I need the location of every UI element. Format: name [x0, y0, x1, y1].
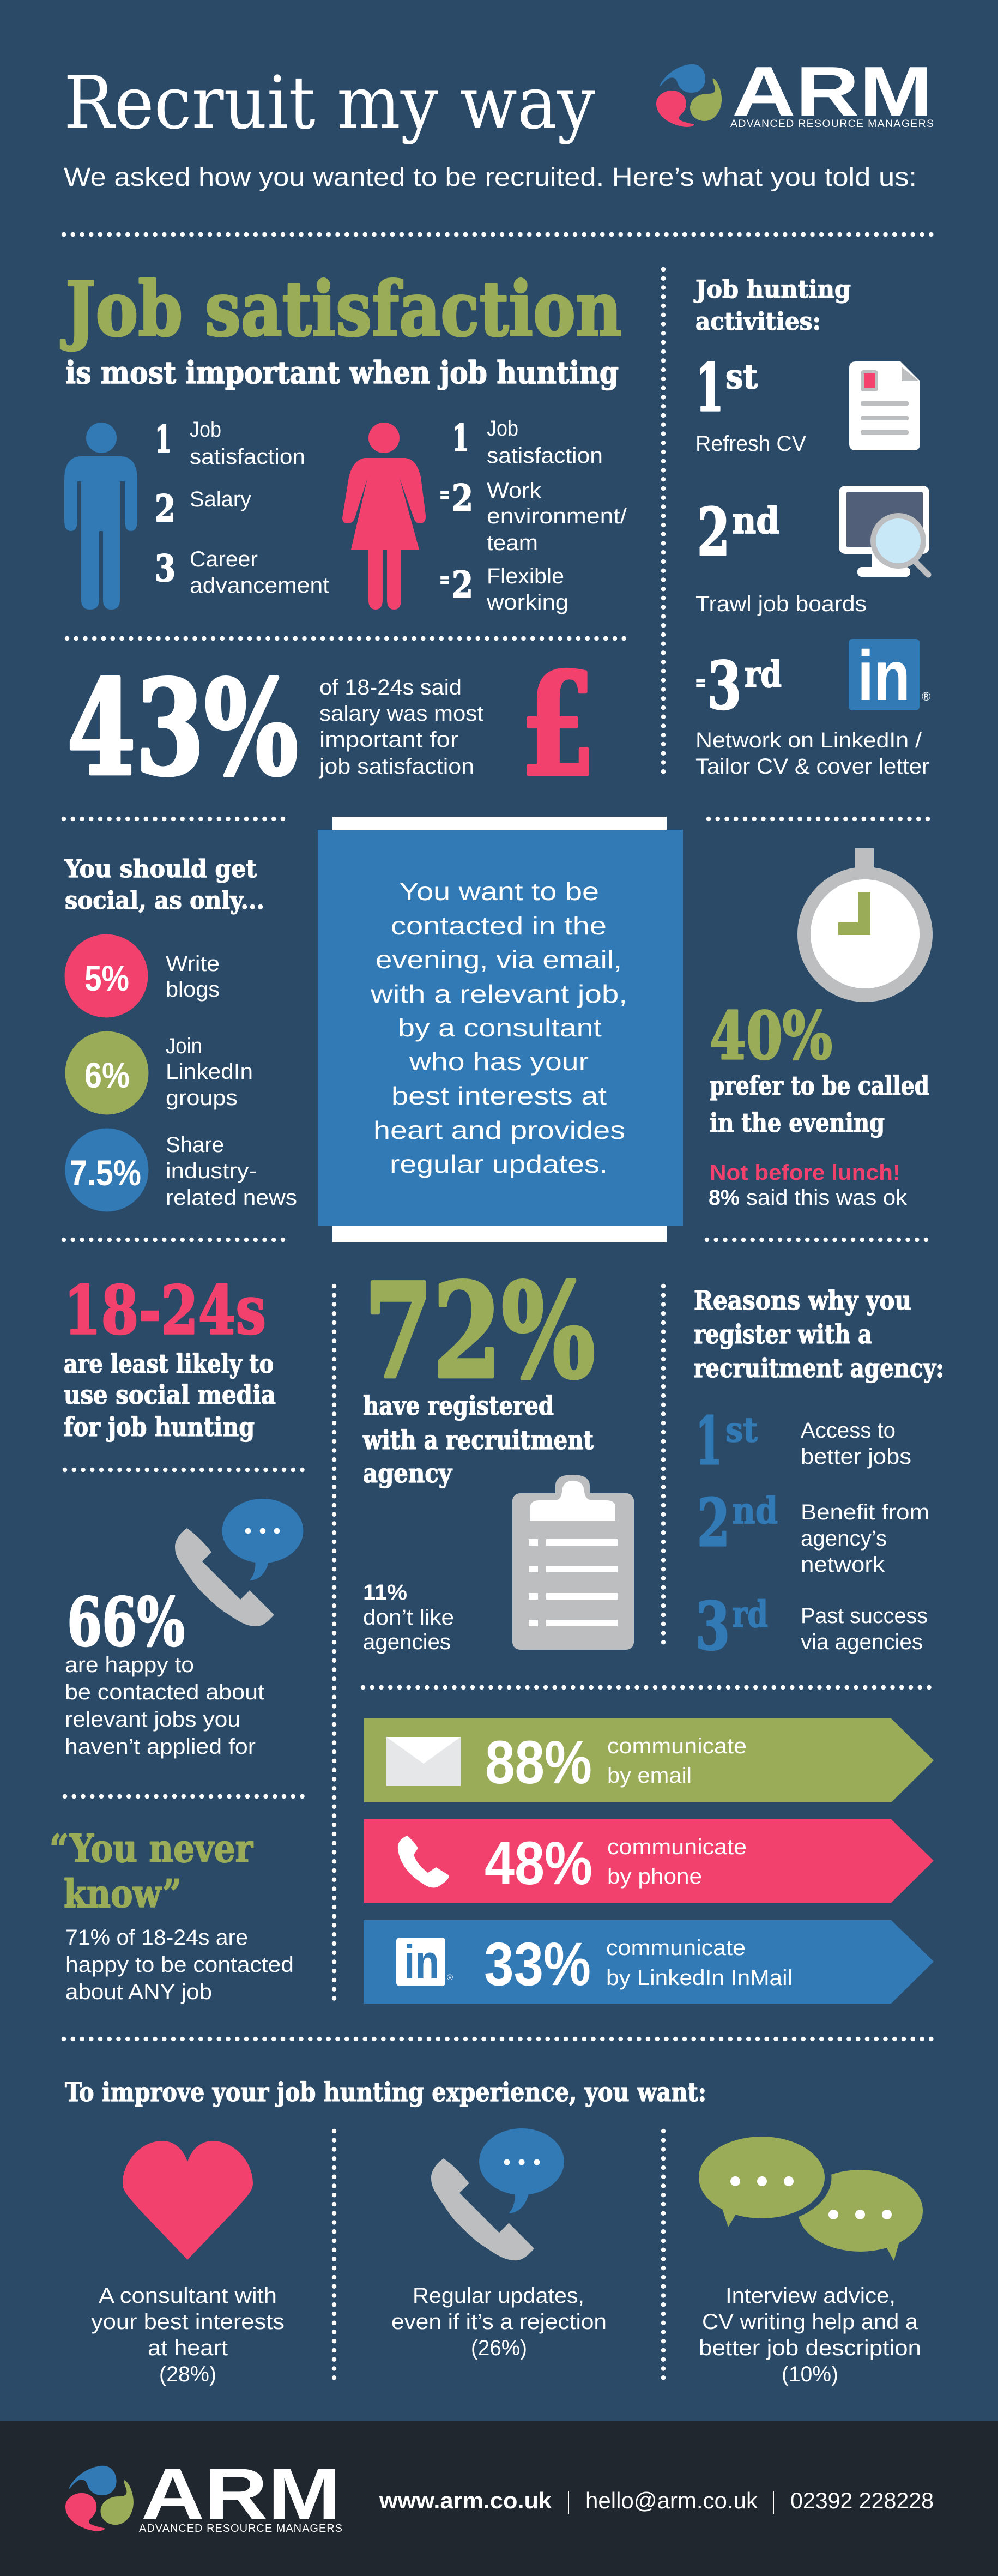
stat: 72%: 72% — [364, 1256, 595, 1408]
text: 11% don't like agencies — [363, 1580, 454, 1654]
text: Regular updates, — [413, 2284, 584, 2308]
heading: job satisfaction: Job satisfaction — [61, 266, 622, 353]
text: 11% don't like agencies: agencies — [363, 1630, 451, 1654]
text: by email: by email — [607, 1764, 692, 1788]
panel: reasons for registering — [694, 1286, 944, 1665]
text: (26%) — [471, 2336, 527, 2360]
icon: pound sign: £ — [521, 642, 595, 807]
icon: linkedin: in — [404, 1935, 439, 1989]
logo: ARM: ARM — [732, 52, 933, 131]
arrow: email — [364, 1718, 934, 1802]
men ranking: advancement — [190, 574, 329, 598]
rank: 2nd — [695, 494, 867, 616]
panel: get social — [64, 854, 297, 1211]
arrow: linkedin — [364, 1920, 934, 2004]
stat: 33%: 33% — [484, 1930, 591, 1998]
stat: 7.5% share news: 7.5% — [70, 1153, 141, 1193]
icon: monitor with magnifier — [839, 486, 929, 577]
text — [391, 2284, 607, 2360]
rank: =3rd: Network on LinkedIn / — [695, 728, 922, 752]
reason 3: via agencies — [801, 1630, 923, 1654]
callout text: contacted in the — [391, 912, 607, 940]
rank: 1st: Refresh CV — [695, 432, 806, 456]
text: 11% don't like agencies: 11% — [363, 1580, 407, 1604]
text: 8% ok: said this was ok — [746, 1186, 908, 1210]
heading: You should get — [64, 854, 257, 883]
stat: 7.5% share news: industry- — [166, 1159, 257, 1183]
women ranking: Work — [487, 479, 542, 503]
reason 2: 2 — [697, 1485, 730, 1561]
women ranking: team — [487, 531, 538, 555]
subtitle: We asked how you wanted to be recruited. Here’s what you told us: — [64, 163, 917, 192]
contact details: hello@arm.co.uk — [585, 2488, 758, 2513]
text: 71%: 71% of 18-24s are — [65, 1926, 248, 1950]
heading — [693, 275, 851, 336]
stat: 6% join linkedin groups: LinkedIn — [166, 1060, 253, 1084]
icon: stopwatch — [797, 848, 933, 1002]
quote: “You never — [50, 1826, 253, 1871]
rank: 1st: st — [725, 357, 758, 396]
text: by phone: by phone — [607, 1865, 702, 1889]
heading — [694, 1286, 944, 1384]
heading — [64, 854, 264, 915]
text: 8% ok: 8% — [709, 1186, 740, 1210]
header — [64, 52, 934, 192]
stat: 7.5% share news: related news — [166, 1186, 297, 1210]
contact details — [379, 2488, 934, 2514]
rank: 1st: 1 — [695, 349, 724, 426]
text: happy to be contacted: are happy to — [65, 1653, 194, 1677]
text: happy to be contacted — [65, 1653, 264, 1759]
heading: recruitment agency: — [694, 1353, 944, 1384]
reason 3: Past success — [801, 1604, 928, 1628]
rank: 2nd: nd — [732, 499, 779, 542]
women ranking: 2 — [452, 563, 473, 606]
callout text — [370, 877, 627, 1178]
panel: you never know — [50, 1826, 294, 2004]
stat: 66%: 66% — [67, 1583, 185, 1661]
contact details: www.arm.co.uk — [379, 2488, 552, 2513]
stat: 5% write blogs: blogs — [166, 978, 220, 1002]
women ranking — [439, 417, 627, 614]
rank: =3rd: = — [695, 670, 706, 696]
panel: job satisfaction — [61, 266, 627, 614]
stat: 7.5% share news: Share — [166, 1133, 224, 1157]
stat: 6% join linkedin groups: Join — [166, 1034, 202, 1058]
reason 2 — [697, 1485, 929, 1577]
rank: =3rd: 3 — [707, 648, 741, 725]
panel: centre callout — [318, 817, 683, 1242]
title: Recruit my way — [64, 61, 595, 146]
reason 3: rd — [732, 1593, 768, 1636]
men ranking: Career — [190, 547, 258, 571]
rank: 2nd: 2 — [697, 494, 730, 571]
men ranking: 2 — [155, 487, 176, 530]
reason 2: Benefit from — [801, 1500, 929, 1524]
rank: =3rd: rd — [745, 653, 782, 696]
heading: register with a — [694, 1319, 872, 1350]
heading: activities: — [695, 307, 821, 336]
text: 71%: about ANY job — [65, 1980, 212, 2004]
icon: linkedin: ® — [447, 1973, 453, 1982]
men ranking: Salary — [190, 487, 251, 511]
text: Interview advice, — [725, 2284, 896, 2308]
text: by phone — [607, 1835, 747, 1889]
text: least likely: for job hunting — [64, 1412, 255, 1443]
reason 2: network — [801, 1553, 885, 1577]
text: prefer evening: prefer to be called — [710, 1071, 929, 1101]
icon: phone with speech bubble — [175, 1499, 303, 1626]
text — [699, 2284, 921, 2386]
women ranking: 1 — [452, 417, 469, 460]
stat: 88%: 88% — [485, 1728, 592, 1796]
women ranking: = — [439, 567, 450, 593]
men ranking: 3 — [155, 547, 176, 590]
text: happy to be contacted: haven’t applied for — [65, 1735, 256, 1759]
text: by email — [607, 1734, 747, 1788]
text: at heart — [148, 2336, 228, 2360]
women ranking: satisfaction — [487, 444, 603, 468]
reason 2: nd — [732, 1489, 778, 1532]
footer — [0, 2421, 998, 2576]
panel: 43 percent salary — [67, 642, 595, 807]
stat: 6% join linkedin groups: 6% — [84, 1055, 130, 1095]
callout text: regular updates. — [390, 1150, 608, 1178]
callout text: heart and provides — [373, 1116, 625, 1144]
stat: 7.5% share news — [65, 1129, 297, 1211]
stat: 5% write blogs — [64, 934, 220, 1017]
text: registered: with a recruitment — [362, 1425, 594, 1456]
text: happy to be contacted: relevant jobs you — [65, 1708, 240, 1732]
icon: phone — [398, 1836, 449, 1888]
logo: ARM: ADVANCED RESOURCE MANAGERS — [139, 2523, 342, 2535]
subheading: is most important when job hunting — [65, 355, 619, 391]
text: salary importance: salary was most — [319, 702, 483, 726]
panel: job hunting activities — [693, 275, 930, 779]
reason 2: agency’s — [801, 1527, 887, 1551]
reason 1: st — [725, 1410, 758, 1450]
text: by linkedin inmail: communicate — [606, 1936, 746, 1960]
reason 3 — [695, 1588, 928, 1665]
panel: updates — [391, 2128, 607, 2360]
logo: ARM: ADVANCED RESOURCE MANAGERS — [730, 118, 934, 130]
text: 71%: happy to be contacted — [65, 1953, 294, 1977]
icon: clipboard — [512, 1475, 634, 1650]
panel: consultant — [91, 2141, 285, 2386]
stat: 43%: 43% — [67, 653, 298, 805]
women ranking: Flexible — [487, 564, 564, 588]
text: happy to be contacted: be contacted about — [65, 1680, 264, 1704]
text: not before lunch: Not before lunch! — [710, 1161, 900, 1185]
icon: heart — [123, 2141, 253, 2260]
rank: 1st — [695, 349, 806, 456]
stat: 40%: 40% — [710, 998, 832, 1075]
text: registered: have registered — [363, 1391, 554, 1421]
icon: man — [64, 423, 137, 610]
text: salary importance — [319, 675, 483, 779]
text: salary importance: of 18-24s said — [319, 675, 462, 699]
callout text: best interests at — [391, 1082, 607, 1110]
logo: ARM — [65, 2454, 342, 2535]
text: A consultant with — [99, 2284, 277, 2308]
text: by phone: communicate — [607, 1835, 747, 1859]
callout text: with a relevant job, — [370, 980, 627, 1008]
reason 1: 1 — [695, 1403, 722, 1480]
text: least likely — [64, 1349, 276, 1443]
text: by email: communicate — [607, 1734, 747, 1758]
text: least likely: are least likely to — [64, 1349, 274, 1379]
icon: document — [849, 361, 920, 450]
callout text: evening, via email, — [376, 945, 622, 974]
stat: 6% join linkedin groups — [65, 1031, 253, 1114]
men ranking: Job — [190, 418, 221, 442]
icon: envelope — [386, 1737, 461, 1786]
heading: social, as only... — [65, 886, 264, 915]
logo: ARM — [656, 52, 934, 131]
panel: advice — [692, 2131, 923, 2386]
men ranking — [155, 418, 329, 598]
contact details: 02392 228228 — [790, 2488, 934, 2513]
quote: know” — [64, 1871, 182, 1916]
text: even if it’s a rejection — [391, 2310, 607, 2334]
men ranking: 1 — [155, 418, 172, 461]
text: 11% don't like agencies: don’t like — [363, 1606, 454, 1630]
stat: 5% write blogs: Write — [166, 952, 220, 976]
stat: 18-24s: 18-24s — [64, 1271, 266, 1349]
icon: linkedin: ® — [922, 690, 930, 703]
icon: phone with speech bubble — [431, 2128, 564, 2260]
text: salary importance: important for — [319, 728, 458, 752]
rank: =3rd: Tailor CV & cover letter — [695, 755, 929, 779]
stat: 48%: 48% — [485, 1829, 592, 1897]
panel: 72 percent registered — [362, 1256, 634, 1654]
reason 3: 3 — [695, 1588, 730, 1665]
women ranking: = — [439, 482, 450, 508]
text — [91, 2284, 285, 2386]
reason 1 — [695, 1403, 911, 1480]
men ranking: satisfaction — [190, 445, 305, 469]
text: (28%) — [159, 2362, 216, 2386]
women ranking: working — [486, 590, 568, 614]
text: by linkedin inmail — [606, 1936, 793, 1990]
text: registered — [362, 1391, 594, 1489]
stat: 5% write blogs: 5% — [84, 958, 129, 998]
arrow: phone — [364, 1819, 934, 1903]
text: 71% — [65, 1926, 294, 2004]
text: least likely: use social media — [64, 1380, 276, 1410]
women ranking: 2 — [452, 476, 473, 520]
reason 1: Access to — [801, 1419, 896, 1443]
text: salary importance: job satisfaction — [319, 755, 474, 779]
quote — [50, 1826, 253, 1916]
panel: evening calls — [709, 848, 933, 1210]
text: registered: agency — [363, 1458, 453, 1489]
rank: =3rd — [695, 648, 929, 779]
heading: Job hunting — [693, 275, 851, 304]
rank: 2nd: Trawl job boards — [695, 592, 867, 616]
icon: woman — [342, 423, 426, 610]
reason 1: better jobs — [801, 1445, 911, 1469]
women ranking: Job — [487, 417, 518, 441]
text: by linkedin inmail: by LinkedIn InMail — [606, 1966, 793, 1990]
text: prefer evening — [710, 1071, 929, 1138]
icon: linkedin: in — [857, 636, 910, 715]
text: (10%) — [782, 2362, 838, 2386]
logo: ARM: ARM — [141, 2454, 341, 2535]
text: better job description — [699, 2336, 921, 2360]
women ranking: environment/ — [487, 504, 627, 528]
text: CV writing help and a — [702, 2310, 918, 2334]
panel: 18-24s — [64, 1271, 276, 1443]
text: prefer evening: in the evening — [710, 1108, 885, 1138]
panel: 66 percent contacted — [65, 1499, 303, 1759]
text: your best interests — [91, 2310, 285, 2334]
stat: 6% join linkedin groups: groups — [166, 1086, 238, 1110]
heading: improve experience: To improve your job hunting experience, you want: — [65, 2077, 706, 2108]
callout text: You want to be — [399, 877, 599, 906]
callout text: who has your — [409, 1047, 589, 1076]
icon: chat bubbles — [692, 2131, 923, 2261]
heading: Reasons why you — [694, 1286, 911, 1316]
callout text: by a consultant — [398, 1013, 602, 1042]
